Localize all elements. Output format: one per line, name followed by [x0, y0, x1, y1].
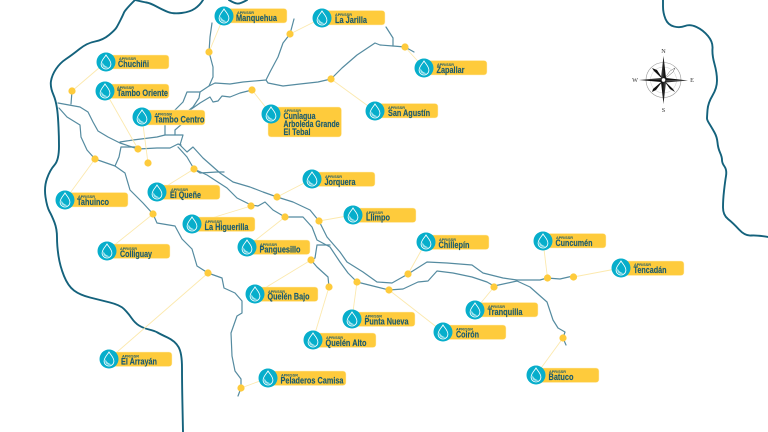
location: Jorquera: APR/SSR — [325, 175, 342, 179]
location: La Jarilla — [286, 8, 385, 38]
location: Cunlagua, Arboleda Grande, El Tebal: Cunlagua — [284, 111, 316, 121]
location: El Arrayán: El Arrayán — [121, 356, 157, 366]
location: Tambo Oriente: APR/SSR — [117, 86, 134, 90]
location: Llimpo: APR/SSR — [366, 211, 383, 215]
location: Tambo Oriente: Tambo Oriente — [117, 88, 168, 98]
location: Colliguay: Colliguay — [120, 249, 152, 259]
location: La Jarilla: La Jarilla — [335, 15, 368, 25]
location: San Agustín — [327, 75, 438, 120]
location: Manquehua: APR/SSR — [237, 11, 254, 15]
location: Cunlagua, Arboleda Grande, El Tebal: Arboleda Grande — [284, 119, 340, 129]
location: Batuco: APR/SSR — [549, 370, 566, 374]
location: Batuco — [526, 334, 599, 384]
location: Cuncumén: APR/SSR — [556, 236, 573, 240]
location: Tranquilla: Tranquilla — [488, 307, 523, 317]
location: Colliguay — [98, 210, 170, 260]
location: Quelén Bajo: Quelén Bajo — [268, 292, 310, 302]
location: La Higuerilla: La Higuerilla — [204, 222, 249, 232]
location: Quelén Alto — [304, 283, 376, 350]
icon: compass rose: N — [661, 48, 666, 55]
location: Peladeros Camisa — [237, 368, 346, 392]
location: El Queñe — [148, 165, 220, 202]
location: Panguesillo: APR/SSR — [260, 243, 277, 247]
location: San Agustín: San Agustín — [388, 108, 430, 118]
location: Coirón: Coirón — [456, 330, 479, 340]
location: El Queñe: El Queñe — [170, 190, 201, 200]
icon: compass rose: W — [632, 77, 638, 84]
location: Tambo Centro: Tambo Centro — [154, 114, 205, 124]
location: Llimpo: Llimpo — [366, 212, 390, 222]
location: Colliguay: APR/SSR — [120, 247, 137, 251]
location: Quelén Bajo — [246, 256, 318, 304]
location: El Arrayán: APR/SSR — [122, 354, 139, 358]
location: El Arrayán — [100, 269, 212, 368]
location: Tambo Centro — [132, 108, 205, 167]
location: Chuchiñi: APR/SSR — [119, 57, 136, 61]
location: Quelén Bajo: APR/SSR — [268, 290, 285, 294]
location: Cunlagua, Arboleda Grande, El Tebal — [248, 86, 342, 137]
location: Punta Nueva: Punta Nueva — [364, 316, 409, 326]
location: Cuncumén — [534, 232, 606, 282]
location: Cunlagua, Arboleda Grande, El Tebal: El Tebal — [284, 127, 310, 137]
location: Chuchiñi — [68, 52, 169, 95]
location: La Higuerilla: APR/SSR — [205, 220, 222, 224]
location: Panguesillo: Panguesillo — [260, 244, 301, 254]
location: Tranquilla — [466, 283, 538, 320]
location: Coirón — [385, 286, 506, 342]
location: Jorquera: Jorquera — [324, 177, 356, 187]
location: San Agustín: APR/SSR — [388, 106, 405, 110]
location: Tahuinco — [56, 155, 128, 210]
location: Zapallar: Zapallar — [436, 65, 465, 75]
location: Quelén Alto: APR/SSR — [326, 336, 343, 340]
location: Chillepín: Chillepín — [438, 240, 470, 250]
location: Tencadán — [570, 258, 684, 281]
location: Chillepín — [404, 232, 489, 278]
location: Chuchiñi: Chuchiñi — [118, 59, 149, 69]
location: Manquehua: Manquehua — [236, 13, 278, 23]
location: Tambo Oriente — [96, 82, 169, 153]
location: Tambo Centro: APR/SSR — [155, 112, 172, 116]
location: Peladeros Camisa: Peladeros Camisa — [280, 376, 344, 386]
location: Tencadán: Tencadán — [634, 265, 666, 275]
icon: compass rose — [632, 48, 694, 114]
location: Panguesillo — [238, 213, 310, 256]
location: Jorquera — [273, 170, 375, 201]
location: Tencadán: APR/SSR — [634, 263, 651, 267]
location: Chillepín: APR/SSR — [439, 238, 456, 242]
location: La Higuerilla — [182, 202, 255, 234]
location: Punta Nueva — [342, 278, 415, 328]
location: Manquehua — [205, 6, 287, 56]
icon: compass rose: S — [662, 107, 666, 114]
location: Tahuinco: Tahuinco — [77, 197, 109, 207]
location: Zapallar: APR/SSR — [437, 63, 454, 67]
location: Zapallar — [401, 43, 487, 78]
location: Cunlagua, Arboleda Grande, El Tebal: APR/SSR — [284, 109, 301, 113]
location: Cuncumén: Cuncumén — [556, 238, 592, 248]
river network — [58, 19, 573, 396]
location: La Jarilla: APR/SSR — [335, 13, 352, 17]
location: El Queñe: APR/SSR — [171, 188, 188, 192]
location: Punta Nueva: APR/SSR — [365, 314, 382, 318]
location: Tahuinco: APR/SSR — [78, 195, 95, 199]
location: Batuco: Batuco — [548, 372, 574, 382]
icon: compass rose: E — [690, 77, 694, 84]
location: Coirón: APR/SSR — [456, 328, 473, 332]
location: Peladeros Camisa: APR/SSR — [281, 374, 298, 378]
location: Quelén Alto: Quelén Alto — [326, 338, 367, 348]
location: Tranquilla: APR/SSR — [488, 305, 505, 309]
location: Llimpo — [315, 206, 416, 225]
